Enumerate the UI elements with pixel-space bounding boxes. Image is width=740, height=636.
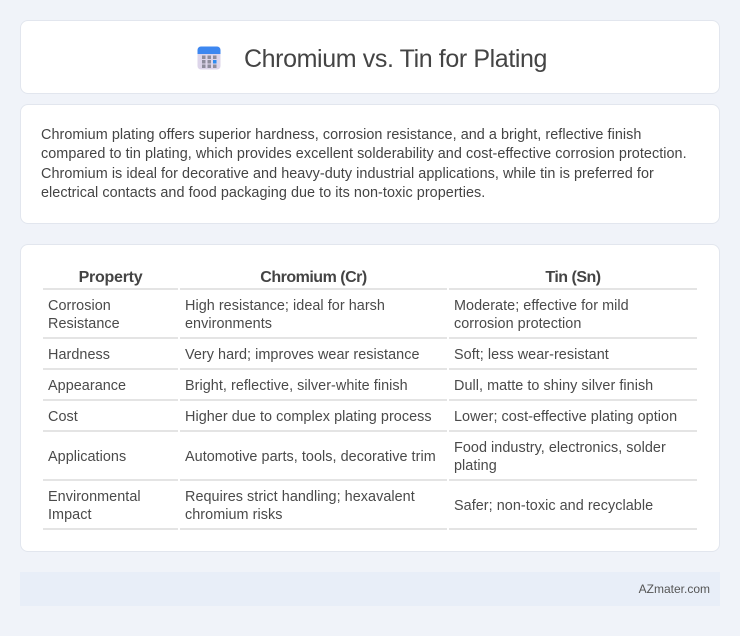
tin applications: Food industry, electronics, solder xyxy=(454,440,666,456)
tin corrosion resistance: Moderate; effective for mild xyxy=(454,298,629,314)
chromium hardness: Very hard; improves wear resistance xyxy=(185,347,420,363)
footer bar xyxy=(20,572,720,606)
tin appearance: Dull, matte to shiny silver finish xyxy=(454,378,653,394)
chromium appearance: Bright, reflective, silver-white finish xyxy=(185,378,408,394)
table header: chromium: Chromium (Cr) xyxy=(260,269,367,286)
row: appearance: Appearance xyxy=(48,378,126,394)
tin applications xyxy=(454,440,666,474)
row: corrosion resistance xyxy=(48,298,120,332)
table header: property: Property xyxy=(79,269,142,286)
chromium applications: Automotive parts, tools, decorative trim xyxy=(185,449,436,465)
row: environmental impact: Environmental xyxy=(48,489,141,505)
row: hardness: Hardness xyxy=(48,347,110,363)
row: environmental impact xyxy=(48,489,141,523)
summary panel xyxy=(20,104,720,224)
icon: calendar xyxy=(198,46,220,70)
title: Chromium vs. Tin for Plating xyxy=(244,45,547,73)
tin hardness: Soft; less wear-resistant xyxy=(454,347,609,363)
chromium corrosion resistance: High resistance; ideal for harsh xyxy=(185,298,385,314)
chromium cost: Higher due to complex plating process xyxy=(185,409,432,425)
tin corrosion resistance: corrosion protection xyxy=(454,316,581,332)
summary text xyxy=(41,127,687,201)
row: cost: Cost xyxy=(48,409,78,425)
chromium environmental impact xyxy=(185,489,415,523)
row: corrosion resistance: Resistance xyxy=(48,316,120,332)
row: corrosion resistance: Corrosion xyxy=(48,298,111,314)
summary text: compared to tin plating, which provides excellent solderability and cost-effective corrosion protection. xyxy=(41,146,687,162)
chromium corrosion resistance xyxy=(185,298,385,332)
chromium environmental impact: chromium risks xyxy=(185,507,282,523)
summary text: Chromium is ideal for decorative and heavy-duty industrial applications, while tin is preferred for xyxy=(41,166,654,182)
summary text: Chromium plating offers superior hardness, corrosion resistance, and a bright, reflective finish xyxy=(41,127,641,143)
tin cost: Lower; cost-effective plating option xyxy=(454,409,677,425)
table header: tin: Tin (Sn) xyxy=(545,269,601,286)
row: applications: Applications xyxy=(48,449,126,465)
chromium corrosion resistance: environments xyxy=(185,316,272,332)
footer credit: AZmater.com xyxy=(639,582,710,596)
tin corrosion resistance xyxy=(454,298,629,332)
tin environmental impact: Safer; non-toxic and recyclable xyxy=(454,498,653,514)
tin applications: plating xyxy=(454,458,497,474)
comparison table panel xyxy=(20,244,720,552)
row: environmental impact: Impact xyxy=(48,507,92,523)
chromium environmental impact: Requires strict handling; hexavalent xyxy=(185,489,415,505)
header panel xyxy=(20,20,720,94)
summary text: electrical contacts and food packaging due to its non-toxic properties. xyxy=(41,185,485,201)
